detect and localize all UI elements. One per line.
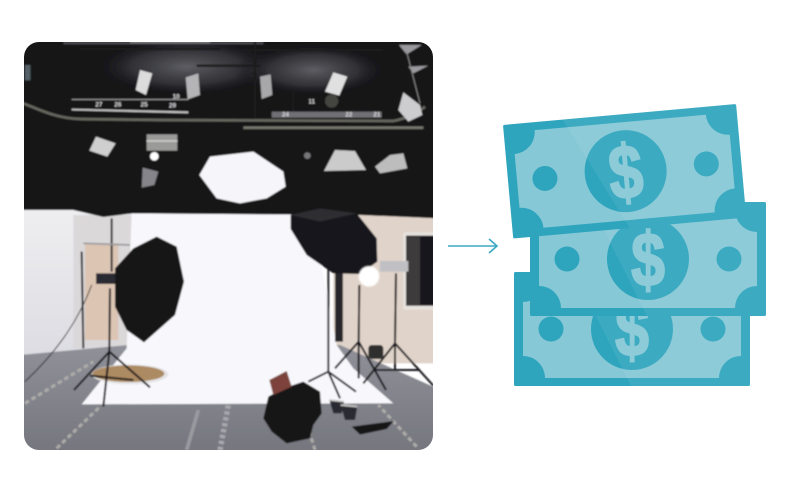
studio floor, walls and white backdrop: [20, 205, 437, 455]
top bill: $: [605, 128, 646, 216]
top bill: [503, 104, 746, 239]
ceiling with lighting rig: 25: [141, 102, 148, 109]
bottom bill: [514, 272, 750, 386]
money stack icon: [503, 104, 766, 386]
ceiling with lighting rig: 29: [169, 103, 177, 110]
ceiling with lighting rig: [24, 42, 433, 206]
middle bill: [530, 202, 766, 316]
ceiling with lighting rig: 22: [345, 112, 353, 119]
main octagonal softbox light: [199, 152, 286, 203]
ceiling with lighting rig: 27: [95, 102, 103, 109]
right octagonal softbox: [291, 208, 377, 274]
ceiling with lighting rig: 10: [173, 93, 180, 100]
arrow: [448, 239, 497, 253]
middle bill: $: [631, 218, 665, 303]
camera bag: [263, 382, 322, 443]
photo: studio with lights and backdrop: [20, 35, 440, 455]
ceiling with lighting rig: 11: [308, 99, 316, 106]
bottom bill: $: [615, 288, 649, 373]
left octagonal softbox: [115, 237, 184, 342]
buckets: [329, 400, 344, 413]
ceiling with lighting rig: 24: [282, 112, 290, 119]
ceiling with lighting rig: 26: [114, 102, 122, 109]
ceiling with lighting rig: 21: [373, 112, 381, 119]
